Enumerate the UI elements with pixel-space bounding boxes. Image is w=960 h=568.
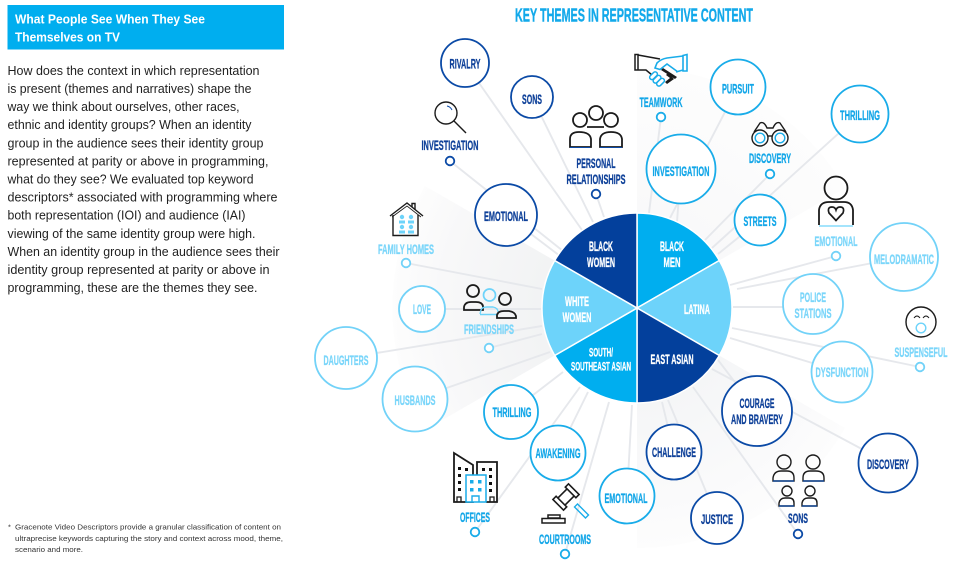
icon: suspenseful face <box>906 307 936 337</box>
theme: Courage and Bravery: COURAGE <box>740 396 774 411</box>
label: Emotional: EMOTIONAL <box>814 234 858 249</box>
body text: represented at parity or above in programming, <box>8 154 268 168</box>
theme: Courage and Bravery <box>722 376 792 446</box>
footnote: ultraprecise keywords capturing the story and context across mood, theme, <box>15 534 283 543</box>
segment: White Women: WHITE <box>565 294 589 309</box>
body text: viewing of the same identity group were high. <box>8 227 256 241</box>
theme: Dysfunction: DYSFUNCTION <box>816 365 868 380</box>
label: Family Homes: FAMILY HOMES <box>378 242 434 257</box>
icon: binoculars <box>752 123 788 146</box>
theme: Sons <box>511 76 553 118</box>
header banner <box>8 5 284 50</box>
icon: personal relationships <box>570 106 622 148</box>
icon: offices <box>454 453 497 502</box>
label: Suspenseful <box>894 345 948 371</box>
theme: Husbands: HUSBANDS <box>394 393 436 408</box>
body text: programming, these are the themes they see. <box>8 281 258 295</box>
icon: gavel <box>542 484 588 523</box>
icon: handshake <box>635 54 687 87</box>
label: Sons: SONS <box>788 511 808 526</box>
segment: White Women: WOMEN <box>562 310 592 325</box>
body text: When an identity group in the audience sees their <box>8 245 280 259</box>
label: Offices: OFFICES <box>460 510 490 525</box>
theme: Love: LOVE <box>413 302 431 317</box>
body text: How does the context in which representation <box>8 64 260 78</box>
theme: Daughters <box>315 327 377 389</box>
icon: magnifying glass <box>435 102 466 133</box>
theme: Rivalry: RIVALRY <box>450 56 480 72</box>
body text: identity group represented at parity or above in <box>8 263 270 277</box>
body text: both representation (IOI) and audience (IAI) <box>8 208 246 222</box>
theme: Challenge: CHALLENGE <box>652 445 696 460</box>
label: Personal Relationships: RELATIONSHIPS <box>566 172 626 187</box>
segment: Black Women: WOMEN <box>587 255 615 270</box>
theme: Emotional: EMOTIONAL <box>484 209 528 224</box>
footnote: Gracenote Video Descriptors provide a granular classification of content on <box>15 522 281 532</box>
theme: Emotional: EMOTIONAL <box>604 491 648 506</box>
theme: Sons: SONS <box>522 92 542 107</box>
theme: Thrilling: THRILLING <box>492 405 532 420</box>
label: Family Homes <box>378 242 434 267</box>
body text: way we think about ourselves, other races, <box>7 100 240 114</box>
theme: Investigation: INVESTIGATION <box>652 164 710 179</box>
theme: Awakening: AWAKENING <box>536 446 580 461</box>
theme: Emotional <box>475 184 537 246</box>
theme: Courage and Bravery: AND BRAVERY <box>731 412 783 427</box>
title: KEY THEMES IN REPRESENTATIVE CONTENT <box>515 4 753 26</box>
segment: East Asian: EAST ASIAN <box>650 352 694 367</box>
theme: Rivalry <box>441 39 489 87</box>
theme: Justice <box>691 492 743 544</box>
theme: Streets: STREETS <box>744 214 776 229</box>
segment: Black Men: BLACK <box>660 239 684 254</box>
icon: person with heart <box>819 176 853 226</box>
footnote <box>8 522 283 554</box>
footnote: * <box>8 522 11 532</box>
segment: Latina <box>637 260 732 356</box>
theme: Emotional <box>600 468 654 524</box>
label: Offices <box>460 510 490 536</box>
segment: South/Southeast Asian: SOUTHEAST ASIAN <box>571 360 631 374</box>
footnote: scenario and more. <box>15 545 83 554</box>
label: Teamwork: TEAMWORK <box>640 95 683 110</box>
segment: South/Southeast Asian: SOUTH/ <box>589 346 613 360</box>
theme: Melodramatic <box>870 223 938 291</box>
segment: Black Men <box>637 213 719 308</box>
segment: Black Women: BLACK <box>589 239 613 254</box>
theme: Discovery <box>858 434 918 492</box>
theme: Investigation <box>646 134 716 204</box>
body text: descriptors* associated with programming where <box>8 190 278 204</box>
body text <box>7 64 280 295</box>
connector lines <box>346 63 920 554</box>
segment: South/Southeast Asian <box>555 308 637 403</box>
theme: Pursuit: PURSUIT <box>722 82 754 96</box>
label: Friendships <box>464 322 514 352</box>
pie chart <box>542 213 732 403</box>
theme: Thrilling: THRILLING <box>840 108 880 123</box>
background wedges <box>392 68 845 548</box>
icon: sons <box>773 455 824 506</box>
label: Personal Relationships <box>566 156 626 198</box>
label: Friendships: FRIENDSHIPS <box>464 322 514 337</box>
theme: Thrilling <box>832 86 888 142</box>
label: Personal Relationships: PERSONAL <box>576 156 616 171</box>
theme: Justice: JUSTICE <box>701 512 733 527</box>
theme: Love <box>399 286 445 332</box>
segment: Black Men: MEN <box>664 255 680 270</box>
header banner: What People See When They See <box>15 12 205 26</box>
theme: Police Stations <box>783 274 843 334</box>
theme: Thrilling <box>484 385 538 439</box>
label: Sons <box>788 511 808 538</box>
label: Emotional <box>814 234 858 260</box>
body text: ethnic and identity groups? When an identity <box>8 118 252 132</box>
body text: group in the audience sees their identity group <box>8 136 264 150</box>
theme: Police Stations: STATIONS <box>794 306 832 321</box>
segment: Latina: LATINA <box>684 302 710 317</box>
segment: Black Women <box>555 213 637 308</box>
theme: Pursuit <box>710 60 766 114</box>
label: Discovery: DISCOVERY <box>749 151 791 166</box>
theme: Husbands <box>382 366 448 432</box>
segment: White Women <box>542 260 637 356</box>
segment: East Asian <box>637 308 719 403</box>
body text: is present (themes and narratives) shape the <box>8 82 252 96</box>
theme: Police Stations: POLICE <box>800 290 826 305</box>
label: Discovery <box>749 151 791 178</box>
label: Investigation: INVESTIGATION <box>422 138 478 153</box>
theme: Streets <box>734 194 786 246</box>
theme: Dysfunction <box>812 342 872 402</box>
theme: Daughters: DAUGHTERS <box>324 353 368 368</box>
theme: Challenge <box>646 424 702 480</box>
label: Investigation <box>422 138 478 165</box>
theme: Discovery: DISCOVERY <box>867 457 909 472</box>
label: Courtrooms: COURTROOMS <box>539 532 591 547</box>
label: Teamwork <box>640 95 683 121</box>
icon: friendships <box>464 285 516 318</box>
theme: Awakening <box>530 426 586 480</box>
icon: family home <box>390 203 423 236</box>
label: Courtrooms <box>539 532 591 558</box>
body text: what do they see? We evaluated top keyword <box>7 172 253 186</box>
header banner: Themselves on TV <box>15 30 120 44</box>
